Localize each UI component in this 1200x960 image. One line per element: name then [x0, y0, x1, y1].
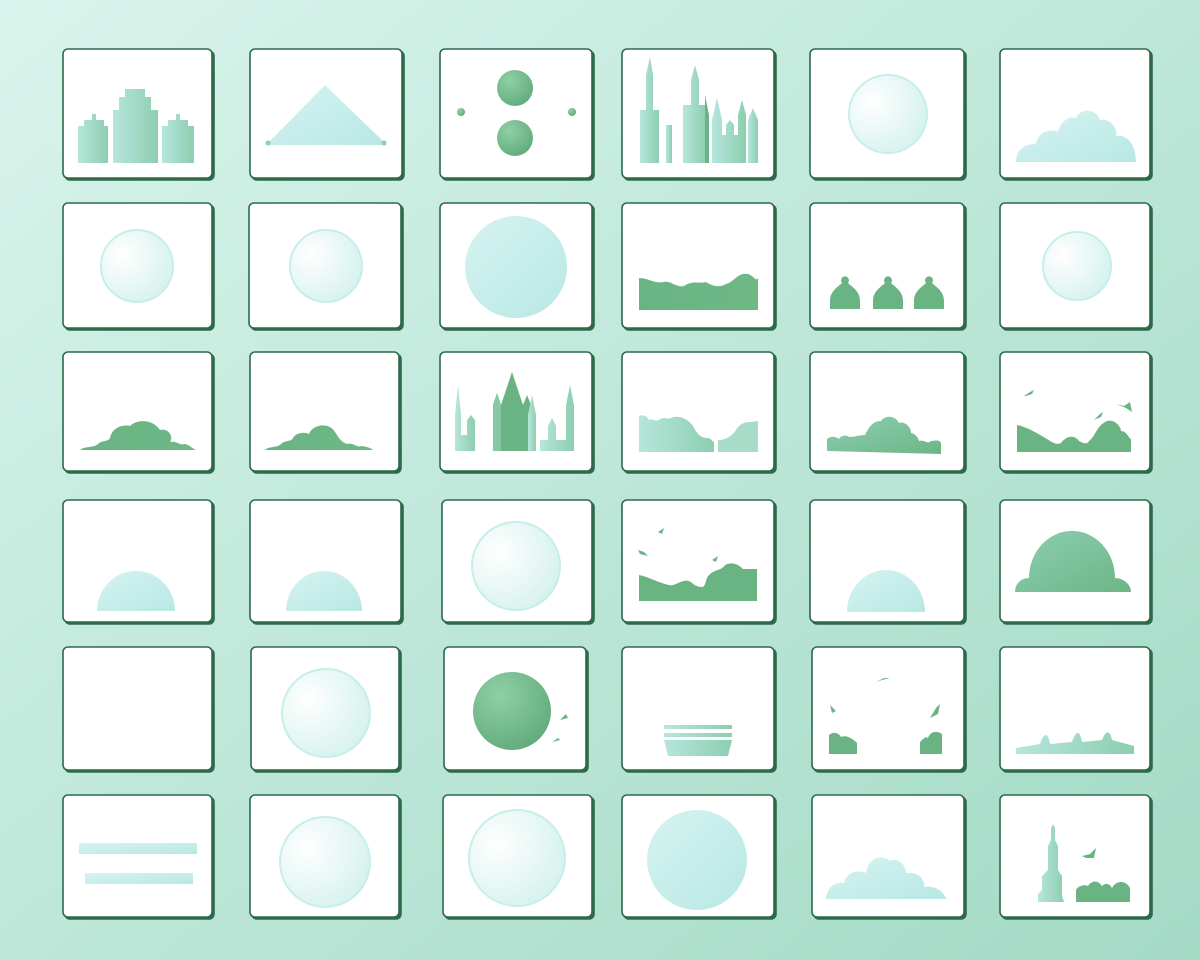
icon: circle r6c3	[469, 810, 565, 906]
icon: bush mound r3c2	[265, 425, 373, 450]
icon: birds hills r3c6	[1017, 390, 1132, 452]
icon: circle r2c1	[101, 230, 173, 302]
icon: buildings	[78, 89, 194, 163]
row 1 cards	[63, 49, 1152, 180]
icon: green ball with birds	[473, 672, 568, 750]
row 2 cards	[63, 203, 1152, 330]
icon: birds bushes r5c5	[829, 678, 942, 754]
icon: dome r4c5	[847, 570, 925, 612]
icon: circle r5c2	[282, 669, 370, 757]
icon: cloud	[1016, 111, 1136, 162]
icon: cloud r6c5	[826, 857, 946, 899]
icon: two green balls	[457, 70, 576, 156]
icon: big cloud dome	[1015, 531, 1131, 592]
icon: three domes	[830, 276, 944, 309]
icon: landscape r3c4	[639, 415, 758, 452]
row 3 cards	[63, 352, 1152, 473]
icon: cathedral	[455, 372, 574, 451]
icon: circle r2c2	[290, 230, 362, 302]
icon: basket	[664, 725, 732, 756]
icon: dome r4c2	[286, 571, 362, 611]
icon: pyramid	[266, 85, 387, 146]
row 4 cards	[63, 500, 1152, 624]
icon: spires skyline	[640, 57, 758, 163]
icon: birds hills r4c4	[638, 528, 757, 601]
icon: low wall	[1016, 732, 1134, 754]
icon: big aqua circle	[465, 216, 567, 318]
icon: circle r6c2	[280, 817, 370, 907]
row 6 cards	[63, 795, 1152, 919]
icon: bush mound r3c5	[827, 417, 941, 454]
icon: circle	[849, 75, 927, 153]
icon: tower and bushes	[1038, 824, 1130, 902]
icon: circle r2c6	[1043, 232, 1111, 300]
icon: dome r4c1	[97, 571, 175, 611]
row 5 cards	[63, 647, 1152, 772]
icon: hills	[639, 274, 758, 310]
icon: aqua circle r6c4	[647, 810, 747, 910]
icon: bush mound r3c1	[80, 421, 196, 450]
icon: two bars	[79, 843, 197, 884]
icon: circle r4c3	[472, 522, 560, 610]
